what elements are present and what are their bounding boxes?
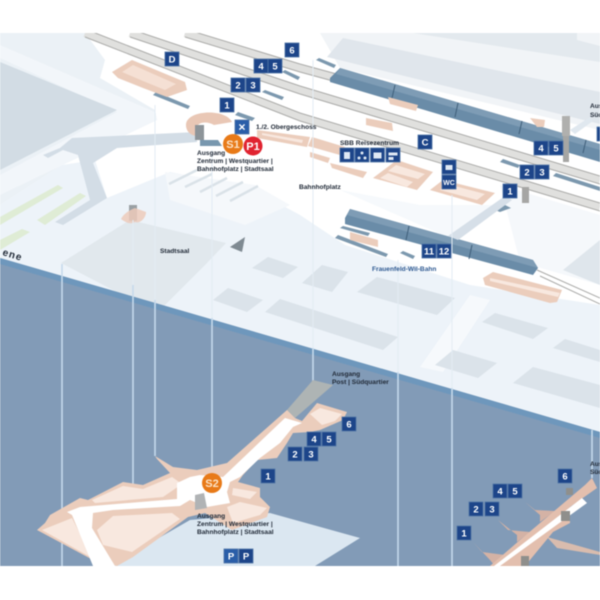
sign: tracks 4 5 east (534, 141, 563, 155)
sign: sector C: C (422, 138, 429, 148)
floor slab edge and lower level background (0, 258, 600, 600)
marker: P1 (244, 136, 262, 156)
sign: tracks 4 5 (254, 59, 282, 73)
label: exit lower level: Zentrum | Westquartier | (197, 521, 273, 528)
sign: tracks 2 3 east: 2 (524, 168, 530, 178)
sign: tracks 4 5 east: 5 (553, 144, 559, 154)
parking signs: P (228, 552, 235, 562)
underground walkway (43, 132, 197, 225)
icon: WC (442, 175, 456, 189)
sign: track 1: 1 (224, 100, 230, 112)
sign: track 1 east: 1 (507, 186, 513, 198)
east lower sign: tracks 2 3 (469, 502, 499, 516)
marker: S2: S2 (205, 478, 219, 490)
lower sign: track 1 (261, 469, 275, 483)
icon: service point (442, 160, 456, 174)
sign: tracks 2 3 east (520, 165, 549, 179)
sign: track 6: 6 (289, 46, 295, 56)
top right grey buildings (327, 33, 600, 285)
lower level left station floor (37, 380, 347, 566)
marker: S1: S1 (226, 139, 240, 151)
footbridge (448, 196, 512, 240)
lower sign: tracks 2 3: 3 (308, 450, 314, 460)
lower sign: tracks 4 5: 5 (326, 434, 332, 446)
label: exit lower level: Ausgang (197, 513, 225, 520)
label: upper floors: 1./2. Obergeschoss (256, 124, 317, 131)
stair towers (121, 116, 593, 252)
sign: tracks 2 3: 3 (250, 80, 256, 92)
label: exit centre: Ausgang (197, 150, 225, 157)
lower sign: track 6: 6 (346, 420, 352, 430)
east lower sign: tracks 4 5 (493, 484, 522, 498)
label: Stadtsaal: Stadtsaal (160, 248, 189, 255)
marker: S1 (223, 134, 243, 154)
lower level parking area (110, 513, 360, 566)
parking signs: P (243, 552, 250, 562)
vertical connector lines (62, 60, 592, 566)
sign: track 1 east (503, 184, 517, 198)
sign: tracks 11 12: 12 (439, 246, 449, 258)
label: Frauenfeld-Wil-Bahn: Frauenfeld-Wil-Bahn (372, 266, 436, 273)
icon: upper floors: ✕ (238, 122, 246, 134)
parking stripes (169, 170, 258, 201)
sign: tracks 4 5 east: 4 (538, 144, 544, 154)
label: exit centre: Zentrum | Westquartier | (197, 158, 273, 165)
rooms (92, 477, 182, 503)
east lower sign: track 6: 6 (562, 472, 568, 482)
lower sign: track 1: 1 (265, 472, 271, 482)
bottom train (345, 209, 538, 275)
lower level right station floor (473, 478, 600, 566)
sign: track 6 east (597, 127, 600, 141)
east lower sign: tracks 4 5: 5 (512, 486, 518, 498)
green areas (0, 185, 86, 250)
salmon wall outline (37, 403, 347, 566)
east lower sign: tracks 2 3: 3 (489, 504, 495, 516)
east lower sign: track 6 (558, 469, 572, 483)
icon: upper floors (235, 120, 249, 134)
sign: tracks 2 3: 2 (235, 80, 241, 92)
sign: sector C (418, 135, 432, 149)
left grey building block (0, 62, 117, 170)
label: Ebene fragment: ene (1, 247, 24, 264)
grey blocks on slab (213, 257, 600, 408)
lower sign: tracks 4 5 (307, 432, 336, 446)
grey exit area (287, 380, 333, 418)
icon: WC: WC (443, 180, 455, 187)
label: exit post: Ausgang (332, 371, 360, 378)
white concourse (67, 418, 302, 566)
sign: tracks 2 3 east: 3 (539, 168, 545, 178)
lower sign: tracks 2 3 (288, 447, 318, 461)
sign: track D: D (169, 54, 176, 66)
sign: track 1 (220, 98, 234, 112)
sign: tracks 4 5: 5 (272, 62, 278, 72)
marker: P1: P1 (246, 141, 260, 153)
lower sign: tracks 2 3: 2 (292, 450, 298, 460)
top train (330, 68, 600, 162)
sign: tracks 2 3 (231, 78, 260, 92)
parking signs (224, 549, 253, 563)
sign: track D (165, 52, 179, 66)
lower sign: track 6 (342, 417, 356, 431)
upper level ground (0, 33, 600, 433)
sign: tracks 11 12: 11 (424, 246, 435, 258)
sign: track 6 (285, 43, 299, 57)
east lower sign: tracks 2 3: 2 (473, 504, 479, 516)
railway tracks (85, 29, 600, 304)
label: exit centre: Bahnhofplatz | Stadtsaal (197, 166, 274, 173)
upper salmon station buildings (112, 60, 562, 303)
service icons (340, 148, 400, 162)
sign: tracks 4 5: 4 (258, 62, 264, 72)
marker: S2 (202, 473, 222, 493)
east lower sign: track 1 (457, 526, 471, 540)
label: exit post: Post | Südquartier (332, 379, 389, 386)
lower sign: tracks 4 5: 4 (311, 434, 317, 446)
east lower sign: tracks 4 5: 4 (497, 486, 503, 498)
label: SBB Reisezentrum: SBB Reisezentrum (340, 140, 399, 147)
platform markers (153, 58, 600, 259)
east lower sign: track 1: 1 (461, 528, 467, 540)
sign: tracks 11 12 (422, 244, 451, 258)
label: Bahnhofplatz: Bahnhofplatz (299, 184, 341, 191)
label: exit lower level: Bahnhofplatz | Stadtsaal (197, 529, 274, 536)
